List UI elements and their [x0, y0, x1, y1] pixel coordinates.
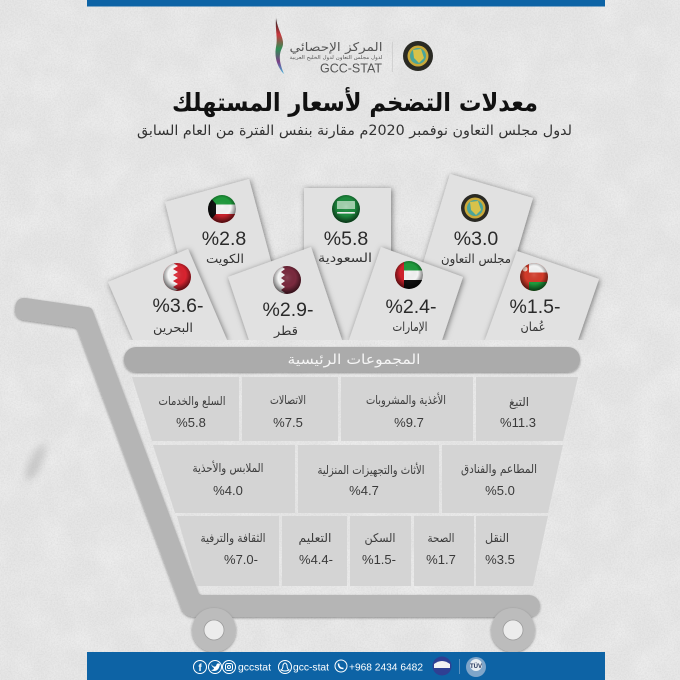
country name: عُمان [520, 319, 546, 334]
value: %3.6- [153, 295, 203, 317]
icon: snapchat [278, 660, 292, 674]
icon: Qatar flag [273, 266, 301, 294]
value: %7.0- [224, 552, 258, 567]
row 2 cell: restaurants and hotels [442, 445, 563, 513]
icon: Oman flag [520, 263, 548, 291]
logo text: Arabic name: المركز الإحصائي [290, 40, 382, 55]
icon: ribbon [275, 18, 284, 74]
icon: facebook: f [198, 663, 202, 674]
logo: TUV badge: TÜV [470, 663, 482, 670]
value: %5.8 [324, 228, 368, 250]
value: %7.5 [273, 415, 303, 430]
row 2 cell: furniture and household [298, 445, 439, 513]
icon: twitter [208, 660, 222, 674]
card: Qatar [228, 247, 342, 340]
value: %1.5- [510, 296, 560, 318]
logo: GCC-STAT [275, 18, 433, 76]
label: النقل [485, 531, 509, 545]
category grid [132, 377, 578, 586]
title: معدلات التضخم لأسعار المستهلك [172, 87, 538, 118]
value: %4.4- [299, 552, 333, 567]
label: الثقافة والترفية [200, 531, 266, 546]
cart frame [15, 298, 540, 617]
cart wheel: left [192, 608, 236, 652]
icon: GCC emblem [403, 41, 433, 71]
logo: quality badge [432, 656, 452, 676]
country name: الإمارات [392, 319, 428, 335]
label: الأثاث والتجهيزات المنزلية [318, 462, 424, 478]
card: Oman [485, 251, 599, 340]
row 1 cell: tobacco [476, 377, 578, 441]
row 1 cell: communications [242, 377, 338, 441]
icon: facebook [194, 660, 206, 674]
label: الملابس والأحذية [192, 460, 264, 476]
value: %3.5 [485, 552, 515, 567]
icon: instagram [222, 660, 236, 674]
icon: GCC emblem [461, 194, 489, 222]
cart wheel: right [491, 608, 535, 652]
label: المطاعم والفنادق [461, 462, 537, 477]
label: التعليم [298, 531, 332, 545]
icon: whatsapp [335, 660, 347, 672]
value: %1.7 [426, 552, 456, 567]
handle: gcc-stat: gcc-stat [293, 662, 329, 674]
value: %5.0 [485, 483, 515, 498]
card: Bahrain [108, 249, 227, 340]
icon: Saudi flag [332, 195, 360, 223]
row 3 cell: culture and recreation [177, 516, 279, 586]
value: %2.4- [386, 296, 436, 318]
label: الصحة [428, 531, 454, 545]
value: %1.5- [362, 552, 396, 567]
value: %5.8 [176, 415, 206, 430]
subtitle: لدول مجلس التعاون نوفمبر 2020م مقارنة بنفس الفترة من العام السابق [137, 123, 572, 139]
value: %11.3 [500, 415, 536, 430]
top bar [87, 0, 605, 6]
row 1 cell: food and beverages [341, 377, 473, 441]
label: الأغذية والمشروبات [366, 392, 446, 408]
header text: المجموعات الرئيسية [288, 352, 420, 368]
row 3 cell: health [414, 516, 474, 586]
country name: مجلس التعاون [441, 251, 511, 267]
label: التبغ [509, 395, 529, 409]
card: GCC [421, 172, 537, 332]
country cards [108, 174, 599, 340]
shopping cart [15, 298, 540, 652]
row 3 cell: transport [476, 516, 548, 586]
section header bar [124, 347, 580, 372]
value: %2.8 [202, 228, 246, 250]
card: Kuwait [163, 177, 275, 340]
icon: UAE flag [395, 261, 423, 289]
country name: البحرين [153, 320, 193, 336]
value: %2.9- [263, 299, 313, 321]
value: %4.7 [349, 483, 379, 498]
label: السلع والخدمات [158, 394, 226, 409]
footer bar [87, 652, 605, 680]
row 2 cell: clothing and footwear [153, 445, 295, 513]
logo: TUV badge [466, 657, 486, 677]
label: السكن [364, 531, 396, 546]
row 3 cell: education [282, 516, 347, 586]
card: Saudi Arabia [304, 188, 391, 340]
value: %9.7 [394, 415, 424, 430]
country name: الكويت [206, 251, 244, 267]
icon: Kuwait flag [208, 195, 236, 223]
value: %3.0 [454, 228, 498, 250]
country name: قطر [273, 323, 298, 339]
label: الاتصالات [270, 393, 306, 407]
logo text: GCC-STAT: GCC-STAT [320, 62, 382, 76]
row 3 cell: housing [350, 516, 411, 586]
card: UAE [349, 247, 463, 340]
handle: gccstat: gccstat [238, 662, 271, 674]
country name: السعودية [318, 250, 372, 266]
row 1 cell: goods and services [132, 377, 239, 441]
phone number: +968 2434 6482 [349, 662, 423, 674]
logo text: Arabic subtitle: لدول مجلس التعاون لدول الخليج العربية [290, 55, 383, 61]
value: %4.0 [213, 483, 243, 498]
icon: Bahrain flag [163, 263, 191, 291]
